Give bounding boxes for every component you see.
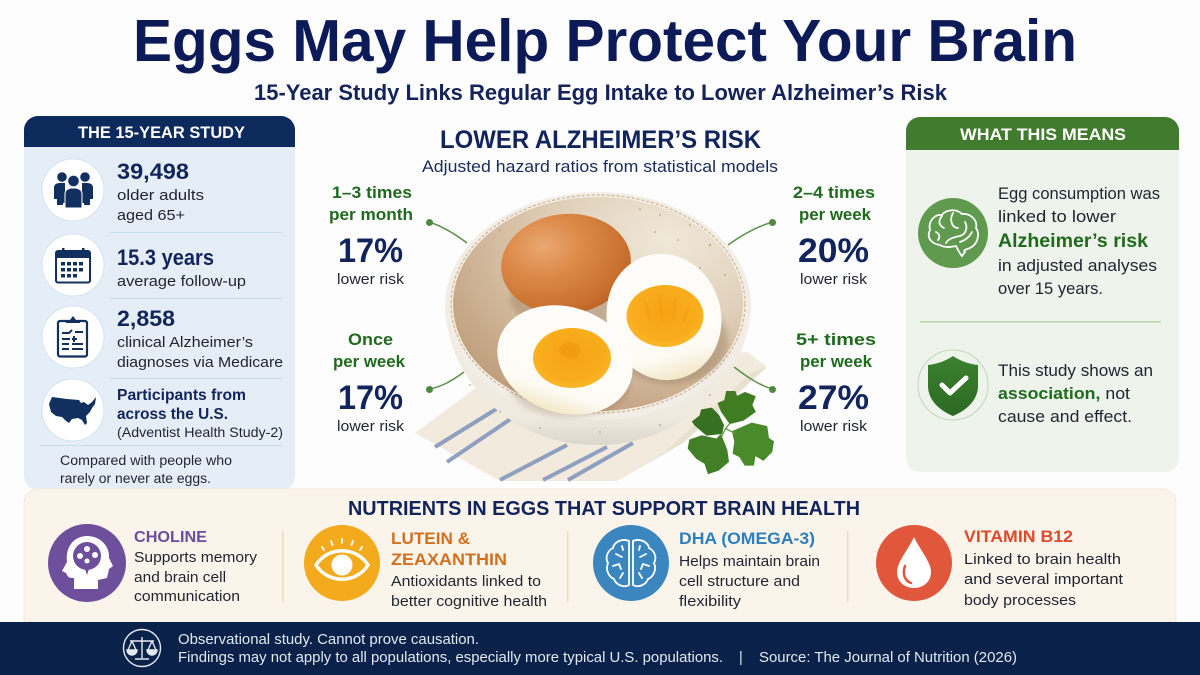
stat: diagnoses [117, 306, 283, 371]
bowl [445, 192, 751, 445]
icon: blood drop [876, 525, 952, 601]
stat: once per week: lower risk [337, 418, 405, 435]
footer text [178, 632, 1017, 666]
footer text: | [739, 650, 743, 666]
subtitle: 15-Year Study Links Regular Egg Intake to Lower Alzheimer’s Risk [254, 80, 948, 105]
text: choline [134, 529, 258, 605]
text: lutein and zeaxanthin: ZEAXANTHIN [391, 550, 507, 569]
icon: choline head [48, 524, 126, 602]
chart heading: Adjusted hazard ratios from statistical models [422, 158, 778, 176]
stat: locations [117, 387, 283, 440]
stat: participants: 39,498 [117, 159, 189, 184]
stat: once per week: Once [348, 331, 393, 349]
text: choline: Supports memory [134, 550, 258, 566]
text: choline: communication [134, 589, 240, 605]
footer text: Source: The Journal of Nutrition (2026) [759, 650, 1017, 666]
stat: 5+ times per week: lower risk [800, 418, 868, 435]
stat: once per week [333, 331, 406, 435]
icon: eye [304, 525, 380, 601]
text: DHA [679, 530, 820, 610]
comparison note [60, 453, 232, 486]
connector: 1-3 times per month [426, 219, 467, 243]
towel [415, 352, 767, 481]
panel background [24, 147, 295, 490]
text: linked to lower risk: Alzheimer’s risk [998, 230, 1148, 252]
text: DHA: cell structure and [679, 574, 800, 590]
panel: nutrients [24, 489, 1176, 622]
text: lutein and zeaxanthin: LUTEIN & [391, 529, 470, 548]
stat: once per week: per week [333, 353, 406, 371]
text: choline: and brain cell [134, 570, 226, 586]
panel header: WHAT THIS MEANS [960, 125, 1126, 144]
panel background [24, 489, 1176, 622]
stat: follow-up: average follow-up [117, 273, 246, 290]
text: lutein and zeaxanthin: better cognitive health [391, 594, 547, 610]
icon: scales [124, 630, 160, 666]
icon: clipboard [42, 306, 104, 368]
stat: 2-4 times per week: 2–4 times [793, 184, 875, 202]
text: vitamin B12: Linked to brain health [964, 552, 1121, 568]
stat: 1-3 times per month: per month [329, 206, 413, 224]
stat: 1-3 times per month: 1–3 times [332, 184, 412, 202]
stat: 5+ times per week [796, 331, 876, 435]
stat: participants: aged 65+ [117, 207, 185, 224]
text: vitamin B12 [964, 528, 1123, 609]
stat: 1-3 times per month: 17% [338, 232, 403, 270]
stat: 2-4 times per week: 20% [798, 232, 869, 270]
stat: diagnoses: 2,858 [117, 306, 175, 331]
comparison note: rarely or never ate eggs. [60, 471, 211, 486]
connector: 5+ times per week [734, 367, 776, 393]
stat: locations: Participants from [117, 387, 246, 404]
icon: people [42, 159, 104, 221]
stat: follow-up [117, 245, 246, 290]
panel header [24, 116, 295, 147]
footer text: Observational study. Cannot prove causation. [178, 632, 479, 648]
stat: 1-3 times per month [329, 184, 413, 288]
text: association not causation: cause and effect. [998, 408, 1132, 426]
text: association not causation: association, not [998, 385, 1130, 403]
stat: 5+ times per week: 5+ times [796, 331, 876, 349]
text: vitamin B12: VITAMIN B12 [964, 528, 1073, 546]
icon: calendar [42, 234, 104, 296]
stat: participants [117, 159, 204, 224]
parsley [688, 392, 773, 473]
halved egg right [593, 241, 735, 393]
text: DHA: flexibility [679, 594, 742, 610]
text: linked to lower risk [998, 185, 1160, 298]
brown egg [496, 207, 636, 326]
stat: locations: (Adventist Health Study-2) [117, 424, 283, 440]
icon: U.S. map [42, 379, 104, 441]
stat: 5+ times per week: 27% [798, 379, 869, 417]
icon: shield check [918, 350, 988, 420]
text: vitamin B12: and several important [964, 572, 1123, 588]
stat: 2-4 times per week: per week [799, 206, 872, 224]
text: lutein and zeaxanthin [391, 529, 547, 610]
text: DHA: DHA (OMEGA-3) [679, 530, 815, 548]
stat: once per week: 17% [338, 379, 403, 417]
connector: once per week [426, 372, 464, 393]
stat: 1-3 times per month: lower risk [337, 271, 405, 288]
comparison note: Compared with people who [60, 453, 232, 468]
text: lutein and zeaxanthin: Antioxidants linked to [391, 574, 541, 590]
stat: locations: across the U.S. [117, 406, 228, 423]
stat: diagnoses: clinical Alzheimer’s [117, 334, 253, 351]
stat: participants: older adults [117, 187, 204, 204]
stat: follow-up: 15.3 years [117, 245, 214, 270]
panel background [906, 150, 1179, 472]
stat: 2-4 times per week [793, 184, 875, 288]
panel: the 15-year study [24, 116, 295, 490]
footer bar [0, 622, 1200, 675]
connector: 2-4 times per week [728, 219, 776, 245]
text: linked to lower risk: Egg consumption was [998, 185, 1160, 203]
text: vitamin B12: body processes [964, 593, 1076, 609]
chart heading [422, 126, 778, 176]
text: association not causation: This study shows an [998, 362, 1153, 380]
text: choline: CHOLINE [134, 529, 207, 546]
icon: brain top view [593, 525, 669, 601]
illustration: bowl of eggs [415, 192, 773, 481]
text: association not causation [998, 362, 1153, 426]
panel: what this means [906, 117, 1179, 472]
stat: diagnoses: diagnoses via Medicare [117, 354, 283, 371]
text: linked to lower risk: linked to lower [998, 208, 1117, 226]
stat: 2-4 times per week: lower risk [800, 271, 868, 288]
panel header: THE 15-YEAR STUDY [78, 123, 246, 142]
halved egg left [483, 288, 647, 432]
panel header [906, 117, 1179, 150]
footer text: Findings may not apply to all populations, especially more typical U.S. populations. [178, 650, 723, 666]
stat: 5+ times per week: per week [800, 353, 873, 371]
text: DHA: Helps maintain brain [679, 554, 820, 570]
icon: brain [918, 198, 988, 268]
title: Eggs May Help Protect Your Brain [133, 8, 1077, 74]
text: linked to lower risk: over 15 years. [998, 280, 1103, 298]
text: linked to lower risk: in adjusted analyses [998, 257, 1157, 275]
panel heading: NUTRIENTS IN EGGS THAT SUPPORT BRAIN HEALTH [348, 497, 860, 520]
chart heading: LOWER ALZHEIMER’S RISK [440, 126, 761, 154]
